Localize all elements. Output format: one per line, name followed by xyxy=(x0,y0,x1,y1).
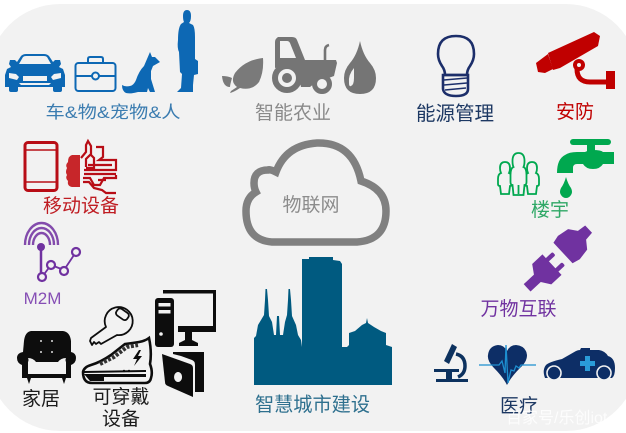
label: 安防 xyxy=(556,101,594,123)
label: 移动设备 xyxy=(43,195,119,217)
icon: M2M signal network xyxy=(25,223,80,281)
label: 医疗 xyxy=(500,395,538,417)
group: mobile devices xyxy=(25,141,119,217)
label: 物联网 xyxy=(282,194,340,216)
group: buildings xyxy=(498,139,614,221)
icon: briefcase xyxy=(76,57,116,91)
icon: cloud xyxy=(246,143,386,242)
icon: phone xyxy=(25,142,57,190)
label: 能源管理 xyxy=(416,103,494,125)
label: 万物互联 xyxy=(480,298,557,320)
group: security xyxy=(536,32,615,123)
label: 智慧城市建设 xyxy=(255,394,370,416)
group: energy management xyxy=(416,36,494,125)
group: wearables xyxy=(83,307,152,430)
icon: plug connector xyxy=(516,217,600,299)
group: internet of everything xyxy=(480,217,600,320)
label xyxy=(92,386,150,430)
group: smart agriculture xyxy=(222,37,376,124)
label: 智能农业 xyxy=(255,102,331,124)
group: home xyxy=(17,331,76,410)
icon: sneaker xyxy=(83,338,152,383)
icon: light bulb xyxy=(438,36,474,96)
icon: water drop xyxy=(344,41,376,94)
icon: water tap and drop xyxy=(557,139,614,198)
icon: armchair xyxy=(17,331,76,384)
icon: wallet xyxy=(162,352,204,397)
icon: person xyxy=(177,10,198,92)
group: healthcare xyxy=(434,344,615,417)
label line 1: 可穿戴 xyxy=(92,386,150,408)
label: 楼宇 xyxy=(531,199,569,221)
group: smart city xyxy=(254,257,392,416)
icon: computer tower xyxy=(155,298,174,347)
icon: leaf xyxy=(222,58,263,93)
icon: heart with pulse xyxy=(479,345,536,385)
watermark: 百家号/乐创iot xyxy=(506,409,608,427)
icon: security camera xyxy=(536,32,615,89)
label: 家居 xyxy=(22,388,60,410)
label: M2M xyxy=(24,289,61,308)
label: 车&物&宠物&人 xyxy=(46,103,180,122)
group: central cloud xyxy=(246,143,386,242)
icon: tractor xyxy=(275,37,337,92)
icon: key xyxy=(90,307,133,345)
icon: dog xyxy=(122,52,160,93)
icon: people outline xyxy=(498,153,539,195)
icon: city skyline xyxy=(254,257,392,385)
icon: circuit hand xyxy=(66,141,116,193)
icon: car xyxy=(5,54,65,92)
group: vehicles, goods, pets and people xyxy=(5,10,198,122)
group: M2M xyxy=(24,223,80,308)
group: computer and wallet xyxy=(155,290,216,397)
icon: monitor xyxy=(163,290,216,346)
label line 2: 设备 xyxy=(102,408,140,430)
icon: ambulance xyxy=(544,348,615,380)
icon: microscope xyxy=(434,344,468,382)
